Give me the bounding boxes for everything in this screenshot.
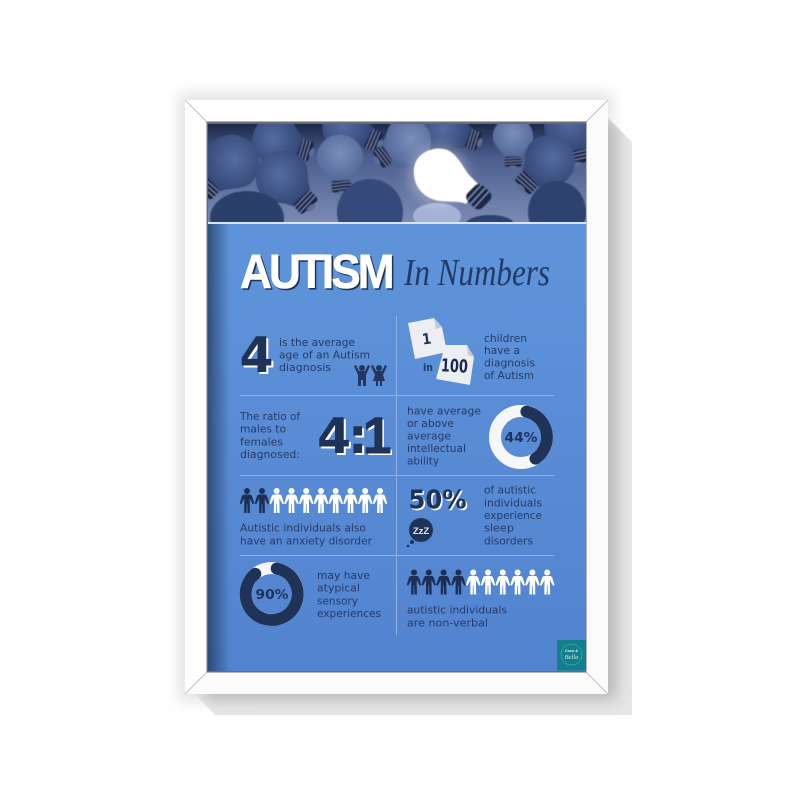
icon: sleep bubble: ZzZ bbox=[413, 526, 429, 537]
icon: dark bulbs bbox=[208, 124, 586, 222]
stat: average age 4: is the average bbox=[279, 336, 355, 349]
stat: 1 in 100 children: of Autism bbox=[484, 369, 534, 382]
stat: ratio 4:1: females bbox=[240, 435, 283, 448]
pictogram: 4 of 10 non-verbal: autistic individuals bbox=[407, 604, 507, 617]
in label: in bbox=[423, 361, 433, 374]
stat: average age 4: age of an Autism bbox=[279, 349, 370, 362]
stat: 90% sensory: sensory bbox=[317, 594, 358, 607]
stat: 44% intellectual ability: average bbox=[407, 430, 451, 443]
stat: average age 4: 4 bbox=[242, 329, 276, 386]
icon: glowing bulb bbox=[408, 144, 494, 229]
icon: children bbox=[354, 365, 387, 386]
stat: ratio 4:1: 4: bbox=[319, 410, 370, 467]
stat: ratio 4:1: males to bbox=[240, 423, 286, 436]
stat: 50% sleep disorders: 50% bbox=[408, 486, 466, 516]
stat: 44% intellectual ability: have average bbox=[407, 404, 481, 417]
stat: 50% sleep disorders: 50% bbox=[410, 487, 468, 517]
stat: 1 in 100 children bbox=[408, 318, 535, 385]
stat: ratio 4:1: diagnosed: bbox=[240, 448, 300, 461]
stat: 44% intellectual ability: intellectual bbox=[407, 442, 466, 455]
icon: paper note 1: 1 bbox=[421, 330, 432, 349]
stat: 1 in 100 children: diagnosis bbox=[484, 357, 535, 370]
title: AUTISM: AUTISM bbox=[240, 244, 395, 298]
photo banner: light bulbs bbox=[208, 124, 586, 222]
donut chart 90%: 90% bbox=[256, 587, 289, 603]
logo: Coco and Bella: Coco & bbox=[565, 649, 578, 653]
stat: ratio 4:1: 1 bbox=[363, 407, 391, 464]
stat: average age 4: 4 bbox=[240, 327, 274, 384]
stat: ratio 4:1: 4: bbox=[317, 408, 368, 465]
stat: 44% intellectual ability: ability bbox=[407, 455, 439, 468]
pictogram: 4 of 10 non-verbal bbox=[407, 570, 554, 629]
stat: 90% sensory: experiences bbox=[317, 607, 381, 620]
frame shadow bbox=[178, 92, 632, 715]
stat: 50% sleep disorders: experience bbox=[484, 509, 542, 522]
donut chart 44%: 44% bbox=[504, 430, 538, 446]
logo: Coco and Bella bbox=[557, 640, 586, 670]
stat: 90% sensory bbox=[246, 568, 381, 620]
white strip under banner bbox=[208, 222, 586, 224]
stat: 1 in 100 children: have a bbox=[484, 344, 520, 357]
stat: ratio 4:1: The ratio of bbox=[239, 410, 301, 423]
blue poster panel bbox=[208, 224, 586, 671]
stat: 50% sleep disorders: disorders bbox=[484, 534, 533, 547]
stat: ratio 4:1: 1 bbox=[365, 409, 393, 466]
pictogram: 4 of 10 non-verbal: are non-verbal bbox=[407, 616, 488, 629]
stat: 1 in 100 children: children bbox=[484, 332, 527, 345]
icon: paper note 100: 100 bbox=[440, 355, 468, 378]
stat: 44% intellectual ability: or above bbox=[407, 417, 454, 430]
title: AUTISM: AUTISM bbox=[242, 246, 396, 300]
stat: 50% sleep disorders bbox=[407, 484, 542, 547]
pictogram: 2 of 10 anxiety: have an anxiety disorder bbox=[240, 534, 372, 547]
stat: 50% sleep disorders: individuals bbox=[484, 496, 542, 509]
stat: 44% intellectual ability bbox=[407, 404, 547, 468]
white picture frame bbox=[185, 100, 608, 694]
stat: 50% sleep disorders: sleep bbox=[484, 522, 514, 535]
stat: ratio 4:1 bbox=[239, 407, 393, 467]
stat: average age 4: diagnosis bbox=[279, 361, 331, 374]
pictogram: 2 of 10 anxiety: Autistic individuals also bbox=[240, 522, 366, 535]
stat: 90% sensory: may have bbox=[317, 569, 370, 582]
logo: Coco and Bella: Bella bbox=[565, 654, 578, 661]
stat: 50% sleep disorders: of autistic bbox=[484, 484, 536, 497]
title: In Numbers: In Numbers bbox=[403, 252, 550, 294]
pictogram: 2 of 10 anxiety bbox=[240, 488, 387, 547]
stat: average age 4 bbox=[240, 327, 387, 386]
stat: 90% sensory: atypical bbox=[317, 582, 360, 595]
